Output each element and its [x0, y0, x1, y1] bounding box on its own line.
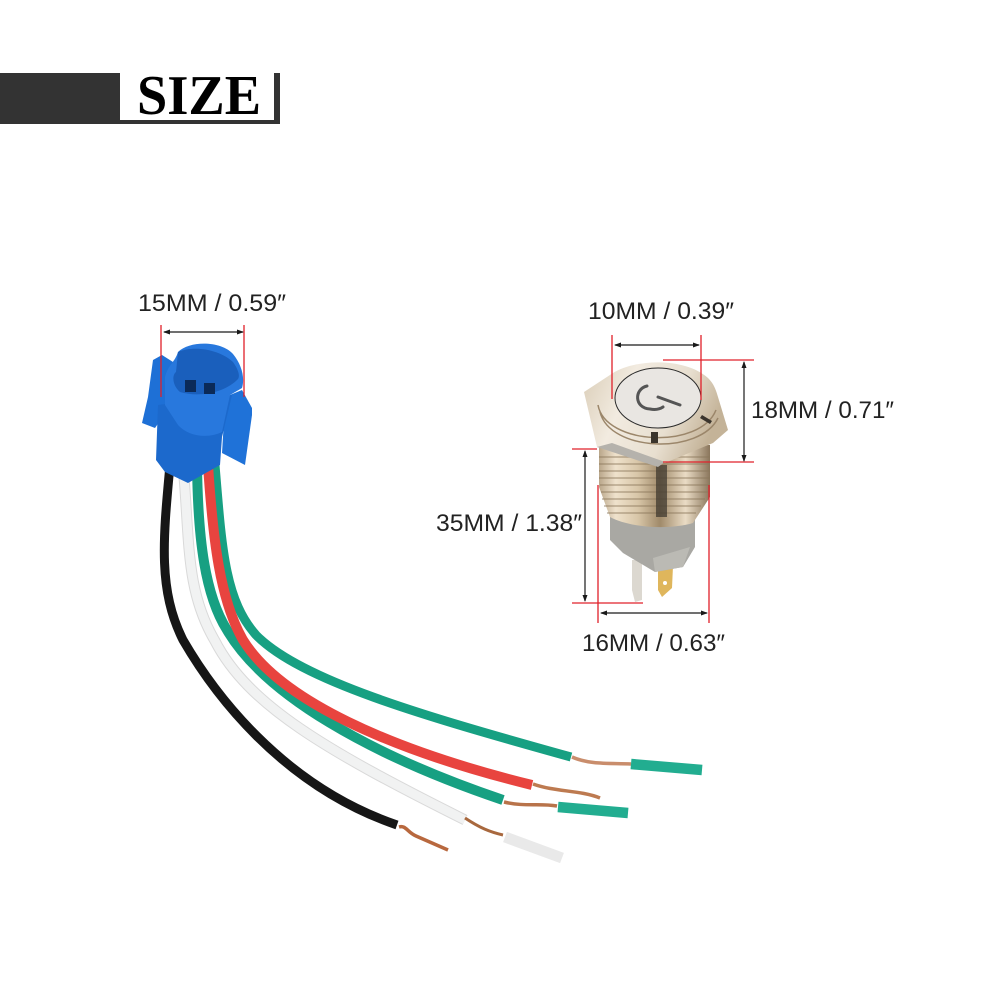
dimension: 10MM: 10MM / 0.39″	[588, 298, 735, 325]
dimension: 15MM	[138, 290, 287, 397]
dimension: 35MM	[436, 449, 643, 603]
connector clip left	[142, 355, 175, 428]
wire harness	[164, 465, 702, 858]
dimension: 15MM: 15MM / 0.59″	[138, 290, 287, 317]
switch terminals	[632, 560, 642, 602]
wire: green upper	[215, 465, 702, 770]
connector interior	[173, 349, 239, 394]
switch grey base	[610, 515, 695, 572]
dimension: 16MM: 16MM / 0.63″	[582, 630, 726, 657]
switch slots	[651, 415, 712, 443]
connector body	[156, 395, 232, 483]
switch hex head	[584, 362, 728, 463]
connector barrel	[165, 344, 243, 436]
dimension: 18MM: 18MM / 0.71″	[751, 397, 895, 424]
wire: green lower	[197, 465, 628, 813]
icon: power symbol	[638, 386, 680, 409]
connector: blue socket	[142, 344, 252, 483]
title banner: SIZE: SIZE	[137, 65, 261, 127]
switch rim	[598, 405, 718, 444]
connector clip right	[222, 390, 252, 465]
wire: white	[183, 465, 562, 858]
switch lens	[615, 368, 701, 428]
dimension: 10MM	[588, 298, 735, 400]
dimension: 16MM	[582, 485, 726, 657]
wire: black	[164, 465, 448, 850]
switch knurled edge	[597, 443, 665, 467]
dimension: 18MM	[663, 360, 895, 462]
wire: red	[208, 465, 600, 798]
switch threaded barrel	[599, 445, 710, 527]
connector pin holes	[185, 380, 215, 394]
title banner: SIZE	[0, 65, 280, 127]
push button switch	[584, 362, 728, 602]
dimension: 35MM: 35MM / 1.38″	[436, 510, 583, 537]
